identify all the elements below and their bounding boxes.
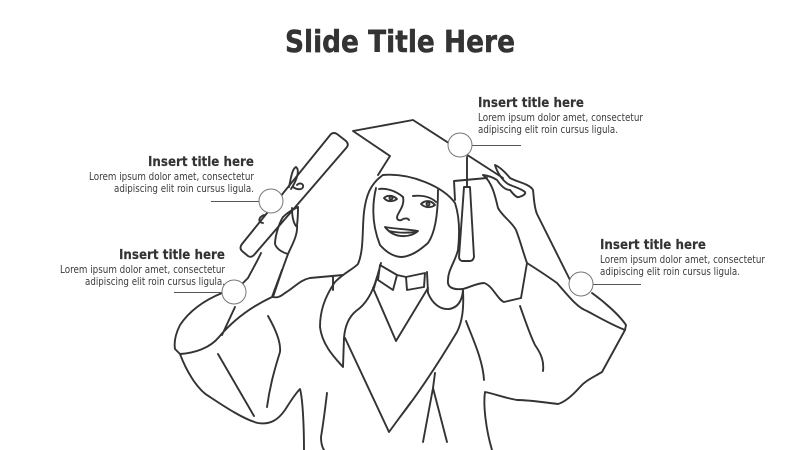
marker: left upper [211,189,283,213]
text block: top: Insert title here [478,96,584,111]
text block: left upper [89,155,255,195]
collar [374,263,428,293]
hair [320,175,521,367]
title: Slide Title Here [285,25,515,60]
text block: top [478,96,644,136]
face [373,188,438,257]
text block: right: Lorem ipsum dolor amet, consectetur [600,254,766,266]
marker: left lower [174,280,246,304]
left hand and arm [240,207,298,297]
text block: top: adipiscing elit roin cursus ligula. [478,124,618,136]
text block: top: Lorem ipsum dolor amet, consectetur [478,112,644,124]
text block: right: Insert title here [600,238,706,253]
text block: left lower: adipiscing elit roin cursus ligula. [85,276,225,288]
tassel [459,157,474,261]
graduation cap [353,120,503,200]
right sleeve [466,263,626,450]
marker: top [448,133,521,157]
gown [345,288,463,432]
icon: diploma scroll [240,133,348,257]
text block: right: adipiscing elit roin cursus ligula. [600,266,740,278]
right hand holding cap [483,165,570,298]
marker: right [569,272,641,296]
text block: left upper: Lorem ipsum dolor amet, consectetur [89,171,255,183]
text block: left upper: adipiscing elit roin cursus ligula. [114,183,254,195]
robe folds [321,373,447,450]
text block: left lower: Lorem ipsum dolor amet, consectetur [60,264,226,276]
text block: right [600,238,766,278]
left sleeve [175,270,343,450]
text block: left lower: Insert title here [119,248,225,263]
text block: left upper: Insert title here [148,155,254,170]
text block: left lower [60,248,226,288]
illustration: graduate line drawing [175,120,626,450]
